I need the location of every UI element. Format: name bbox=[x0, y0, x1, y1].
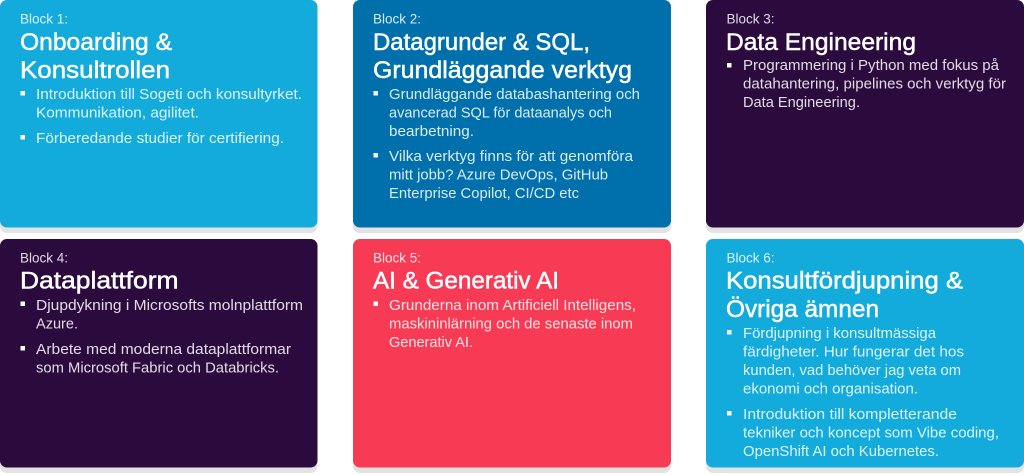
bullet list: block 1: Kommunikation, agilitet. bbox=[36, 106, 199, 122]
heading: block 3: Data Engineering bbox=[726, 29, 916, 56]
bullet list: block 1: Introduktion till Sogeti och konsultyrket. bbox=[36, 87, 302, 103]
label: block 6: Block 6: bbox=[726, 250, 774, 266]
bullet list: block 2: avancerad SQL för dataanalys och bbox=[389, 106, 612, 122]
bullet list: block 6: tekniker och koncept som Vibe coding, bbox=[743, 426, 999, 442]
panel: block 4 bbox=[0, 239, 318, 473]
bullet list: block 6: kunden, vad behöver jag veta om bbox=[743, 363, 961, 379]
bullet list: block 3: Programmering i Python med fokus på bbox=[743, 58, 1000, 74]
label: block 4: Block 4: bbox=[20, 250, 68, 266]
bullet list: block 6: Introduktion till kompletterande bbox=[743, 407, 957, 423]
bullet list: block 6: ekonomi och organisation. bbox=[743, 382, 918, 398]
heading: block 6 bbox=[726, 268, 963, 323]
heading: block 6: Övriga ämnen bbox=[726, 296, 879, 323]
heading: block 6: Konsultfördjupning & bbox=[726, 268, 963, 294]
bullet list: block 3: Data Engineering. bbox=[743, 95, 860, 111]
bullet list: block 4: Azure. bbox=[36, 316, 78, 332]
label: block 2: Block 2: bbox=[373, 12, 421, 26]
bullet list: block 2: Grundläggande databashantering och bbox=[389, 87, 640, 103]
bullet list: block 5: Generativ AI. bbox=[389, 335, 473, 351]
heading: block 2: Grundläggande verktyg bbox=[373, 57, 632, 84]
heading: block 2 bbox=[373, 29, 632, 84]
bullet list: block 4: Djupdykning i Microsofts molnplattform bbox=[36, 298, 303, 314]
bullet list: block 6: Fördjupning i konsultmässiga bbox=[743, 326, 937, 342]
heading: block 4: Dataplattform bbox=[20, 268, 178, 294]
heading: block 1: Konsultrollen bbox=[20, 57, 170, 84]
panel: block 6 bbox=[706, 239, 1024, 473]
bullet list: block 3 bbox=[727, 58, 1006, 111]
bullet list: block 6: OpenShift AI och Kubernetes. bbox=[743, 444, 939, 460]
heading: block 5: AI & Generativ AI bbox=[373, 268, 559, 294]
bullet list: block 3: datahantering, pipelines och verktyg för bbox=[743, 76, 1006, 92]
label: block 1: Block 1: bbox=[20, 12, 68, 26]
heading: block 1 bbox=[20, 29, 172, 84]
bullet list: block 6: färdigheter. Hur fungerar det hos bbox=[743, 344, 964, 360]
bullet list: block 4: Arbete med moderna dataplattformar bbox=[36, 342, 291, 358]
heading: block 2: Datagrunder & SQL, bbox=[373, 29, 590, 56]
bullet list: block 5: maskininlärning och de senaste inom bbox=[389, 316, 633, 332]
label: block 3: Block 3: bbox=[726, 12, 774, 26]
heading: block 1: Onboarding & bbox=[20, 29, 172, 56]
bullet list: block 1 bbox=[20, 87, 302, 147]
bullet list: block 6 bbox=[727, 326, 999, 460]
bullet list: block 2: mitt jobb? Azure DevOps, GitHub bbox=[389, 168, 608, 184]
bullet list: block 4: som Microsoft Fabric och Databricks. bbox=[36, 360, 279, 376]
bullet list: block 2 bbox=[374, 87, 640, 202]
bullet list: block 1: Förberedande studier för certifiering. bbox=[36, 131, 284, 147]
bullet list: block 2: bearbetning. bbox=[389, 124, 474, 140]
bullet list: block 4 bbox=[20, 298, 303, 376]
bullet list: block 5: Grunderna inom Artificiell Intelligens, bbox=[389, 298, 636, 314]
panel: block 5 bbox=[353, 239, 671, 473]
bullet list: block 5 bbox=[374, 298, 636, 351]
label: block 5: Block 5: bbox=[373, 250, 421, 266]
panel: block 2 bbox=[353, 0, 671, 233]
bullet list: block 2: Enterprise Copilot, CI/CD etc bbox=[389, 186, 579, 202]
panel: block 3 bbox=[706, 0, 1024, 233]
panel: block 1 bbox=[0, 0, 318, 233]
bullet list: block 2: Vilka verktyg finns för att genomföra bbox=[389, 149, 634, 165]
